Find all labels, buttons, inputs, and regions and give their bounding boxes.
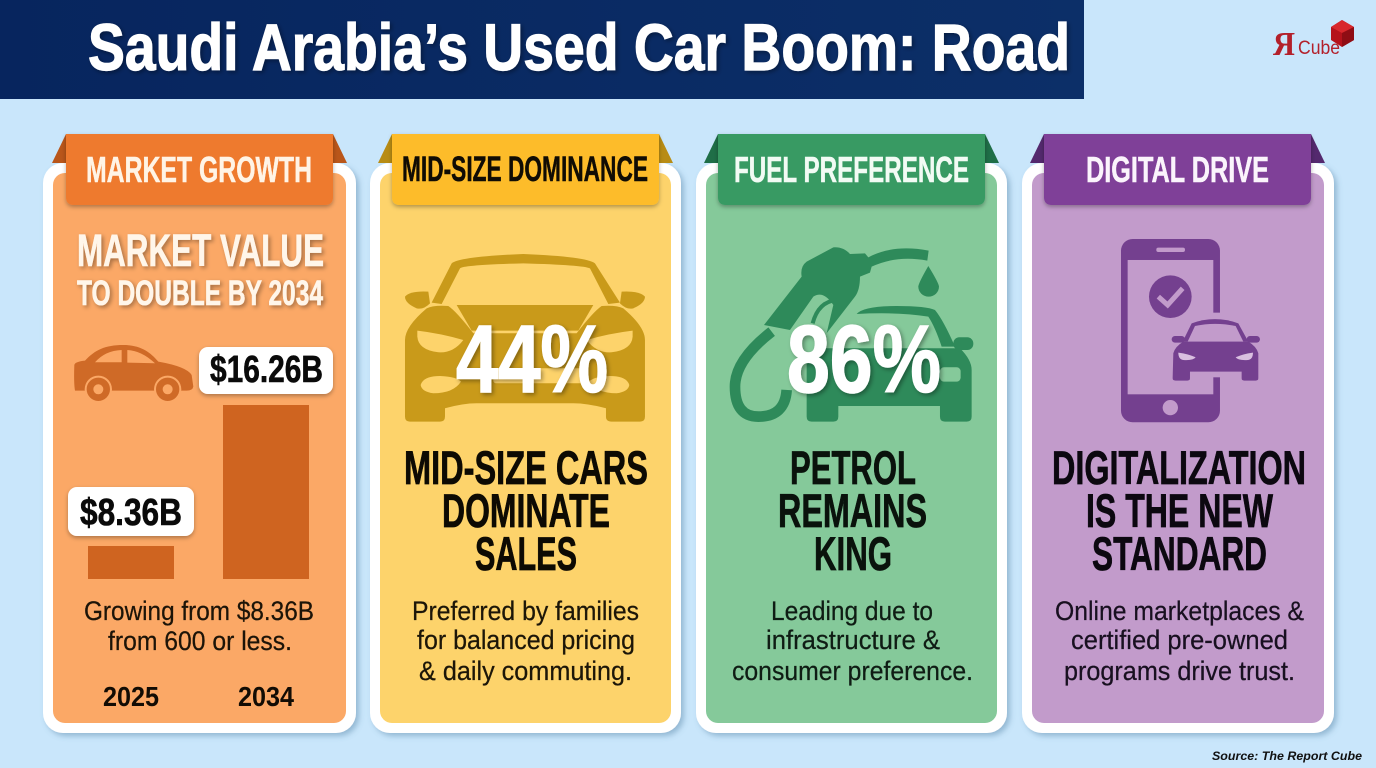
text: fuel description (732, 596, 973, 686)
ribbon: digital drive: DIGITAL DRIVE (1086, 149, 1269, 190)
logo: Я (1273, 26, 1295, 63)
heading: digitalization: IS THE NEW (1086, 484, 1273, 537)
text: fuel description: Leading due to (771, 596, 933, 626)
bar chart: market value: $16.26B (210, 349, 323, 391)
text: mid-size description: for balanced pricing (417, 625, 635, 655)
heading: petrol remains king: PETROL (790, 441, 916, 494)
heading: mid-size cars: MID-SIZE CARS (404, 441, 648, 494)
heading: petrol remains king: KING (814, 527, 892, 580)
text: digital description (1055, 596, 1304, 686)
source note: Source: The Report Cube (1212, 749, 1362, 763)
text: digital description: Online marketplaces & (1055, 596, 1304, 626)
ribbon: mid-size dominance: MID-SIZE DOMINANCE (402, 150, 648, 189)
ribbon: fuel preference (704, 134, 999, 205)
title banner: Saudi Arabia’s Used Car Boom: Road (88, 10, 1070, 84)
icon: car side (74, 345, 193, 403)
icon: phone with car (1121, 239, 1260, 422)
axis labels: 2034 (238, 681, 294, 712)
stat: 44%: 44% (456, 306, 608, 413)
heading: petrol remains king: REMAINS (778, 484, 927, 537)
panel: digital drive (1022, 134, 1334, 733)
icon: car front (405, 254, 645, 422)
ribbon: mid-size dominance (378, 134, 673, 205)
heading: mid-size cars: DOMINATE (442, 484, 610, 537)
stat: 86%: 86% (787, 306, 941, 413)
text: mid-size description: Preferred by families (412, 596, 639, 626)
panel: mid-size dominance (370, 134, 681, 733)
ribbon: digital drive (1030, 134, 1325, 205)
heading: market value: TO DOUBLE BY 2034 (77, 274, 323, 313)
text: growth description: from 600 or less. (108, 626, 292, 656)
heading: mid-size cars (404, 441, 648, 580)
text: digital description: certified pre-owned (1071, 625, 1288, 655)
heading: digitalization: STANDARD (1092, 527, 1267, 580)
heading: market value (77, 225, 324, 313)
text: digital description: programs drive trust. (1064, 656, 1295, 686)
text: growth description: Growing from $8.36B (84, 596, 314, 626)
text: growth description (84, 596, 314, 656)
ribbon: fuel preference: FUEL PREFERENCE (734, 149, 969, 190)
axis labels: 2025 (103, 681, 159, 712)
text: fuel description: consumer preference. (732, 656, 973, 686)
icon: fuel nozzle and car (735, 247, 973, 422)
heading: market value: MARKET VALUE (77, 225, 324, 276)
text: mid-size description (412, 596, 639, 686)
logo (1273, 20, 1354, 63)
panel: fuel preference (696, 134, 1007, 733)
text: mid-size description: & daily commuting. (419, 656, 632, 686)
heading: mid-size cars: SALES (475, 527, 577, 580)
axis labels (103, 681, 294, 712)
title banner (0, 0, 1084, 99)
bar chart: market value (68, 347, 333, 579)
panel: market growth (43, 134, 356, 733)
ribbon: market growth (52, 134, 347, 205)
logo: Cube (1298, 38, 1340, 59)
text: fuel description: infrastructure & (766, 625, 940, 655)
heading: digitalization (1052, 441, 1306, 580)
heading: petrol remains king (778, 441, 927, 580)
bar chart: market value: $8.36B (80, 492, 182, 534)
ribbon: market growth: MARKET GROWTH (86, 149, 312, 190)
